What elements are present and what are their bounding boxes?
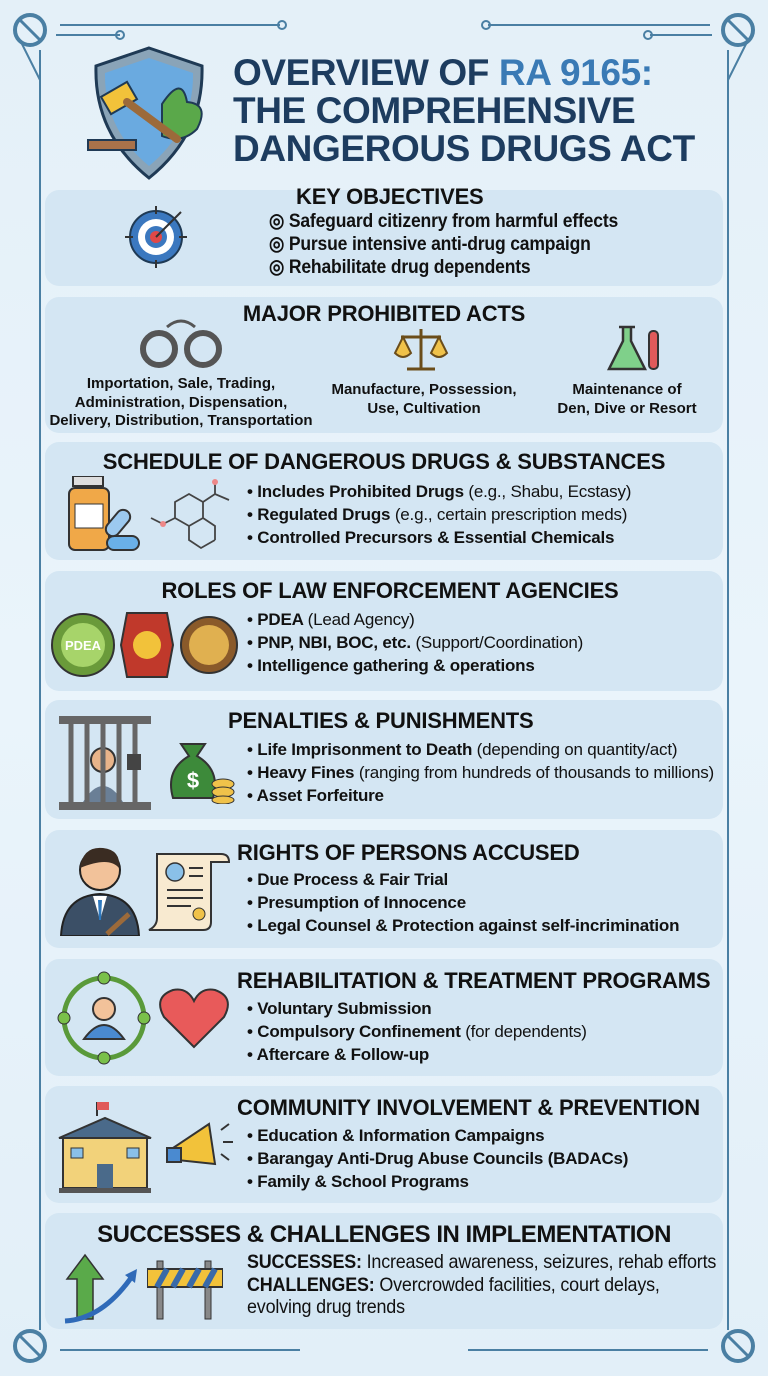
list: agency roles: • Intelligence gathering & operations [247,656,535,675]
panel: law enforcement [45,571,723,691]
text: trafficking acts: Importation, Sale, Trading, [87,375,275,392]
heading: COMMUNITY INVOLVEMENT & PREVENTION [237,1095,700,1120]
heading: RIGHTS OF PERSONS ACCUSED [237,840,580,865]
list: community: • Family & School Programs [247,1172,469,1191]
objectives list: ◎ Rehabilitate drug dependents [269,256,530,278]
list: programs: • Voluntary Submission [247,999,431,1018]
icon: target [125,206,187,268]
icon: megaphone [166,1122,233,1166]
icon: agency seals [51,612,238,678]
icon: person in circle [58,972,150,1064]
panel: schedule of drugs [45,442,723,560]
text: successes and challenges: CHALLENGES: Overcrowded facilities, court delays, [247,1274,660,1296]
text: trafficking acts: Administration, Dispensation, [75,394,287,410]
icon: scroll document [148,853,230,931]
icon: shield with gavel and leaf [87,46,204,180]
list: penalties [247,740,714,805]
list: penalties: • Asset Forfeiture [247,786,384,805]
title: OVERVIEW OF RA 9165: [233,52,653,93]
list: agency roles [247,610,583,675]
list: drug categories [247,482,631,547]
list: community: • Barangay Anti-Drug Abuse Councils (BADACs) [247,1149,628,1168]
title [233,52,695,169]
objectives list: ◎ Safeguard citizenry from harmful effects [269,210,618,232]
icon: molecule [150,479,230,549]
list: community [247,1126,628,1191]
heading: SUCCESSES & CHALLENGES IN IMPLEMENTATION [97,1221,671,1248]
panel: major prohibited acts [45,297,723,433]
title: DANGEROUS DRUGS ACT [233,128,695,169]
heading: SCHEDULE OF DANGEROUS DRUGS & SUBSTANCES [103,449,665,474]
icon: money bag: $ [187,768,199,793]
icon: school building [58,1102,152,1193]
panel: key objectives [45,190,723,286]
list: rights: • Due Process & Fair Trial [247,870,448,889]
heading: MAJOR PROHIBITED ACTS [243,301,525,326]
list: agency roles: • PDEA (Lead Agency) [247,610,415,629]
list: penalties: • Heavy Fines (ranging from hundreds of thousands to millions) [247,763,714,782]
icon: flask [607,326,659,370]
heading: PENALTIES & PUNISHMENTS [228,708,533,733]
objectives list [269,210,618,278]
list: programs: • Aftercare & Follow-up [247,1045,429,1064]
list: drug categories: • Controlled Precursors & Essential Chemicals [247,528,614,547]
heading: ROLES OF LAW ENFORCEMENT AGENCIES [161,578,619,603]
icon: lawyer [60,848,140,936]
text: maintenance of den [557,381,697,416]
text: manufacture: Manufacture, Possession, [331,381,517,398]
list: drug categories: • Includes Prohibited Drugs (e.g., Shabu, Ecstasy) [247,482,631,501]
icon: handcuffs [140,320,222,368]
text: trafficking acts: Delivery, Distribution, Transportation [49,412,313,429]
list: rights [247,870,679,935]
icon: up arrow and trend [64,1254,137,1324]
text: successes and challenges: evolving drug trends [247,1296,405,1318]
text: manufacture: Use, Cultivation [367,400,481,416]
icon: jail [59,716,151,810]
list: penalties: • Life Imprisonment to Death (depending on quantity/act) [247,740,677,759]
title: THE COMPREHENSIVE [233,90,635,131]
panel: community involvement [45,1086,723,1203]
icon: scales [394,329,448,370]
heading: REHABILITATION & TREATMENT PROGRAMS [237,968,710,993]
text: successes and challenges [247,1251,716,1318]
text: maintenance of den: Den, Dive or Resort [557,400,697,416]
icon: pill bottle [68,476,140,551]
list: agency roles: • PNP, NBI, BOC, etc. (Support/Coordination) [247,633,583,652]
text: trafficking acts [49,375,313,429]
list: programs: • Compulsory Confinement (for dependents) [247,1022,587,1041]
panel: penalties [45,700,723,819]
objectives list: ◎ Pursue intensive anti-drug campaign [269,233,591,255]
text: manufacture [331,381,517,416]
heading: KEY OBJECTIVES [296,184,484,209]
list: programs [247,999,587,1064]
panel: successes & challenges [45,1213,723,1329]
list: community: • Education & Information Campaigns [247,1126,544,1145]
list: drug categories: • Regulated Drugs (e.g., certain prescription meds) [247,505,627,524]
panel: rehabilitation [45,959,723,1076]
list: rights: • Presumption of Innocence [247,893,466,912]
icon: heart [159,988,229,1048]
icon: money bag [170,743,234,804]
text: successes and challenges: SUCCESSES: Increased awareness, seizures, rehab efforts [247,1251,716,1273]
icon: barrier [147,1260,223,1320]
panel: rights of accused [45,830,723,948]
icon: agency seals: PDEA [65,638,102,653]
text: maintenance of den: Maintenance of [572,381,682,398]
list: rights: • Legal Counsel & Protection against self-incrimination [247,916,679,935]
